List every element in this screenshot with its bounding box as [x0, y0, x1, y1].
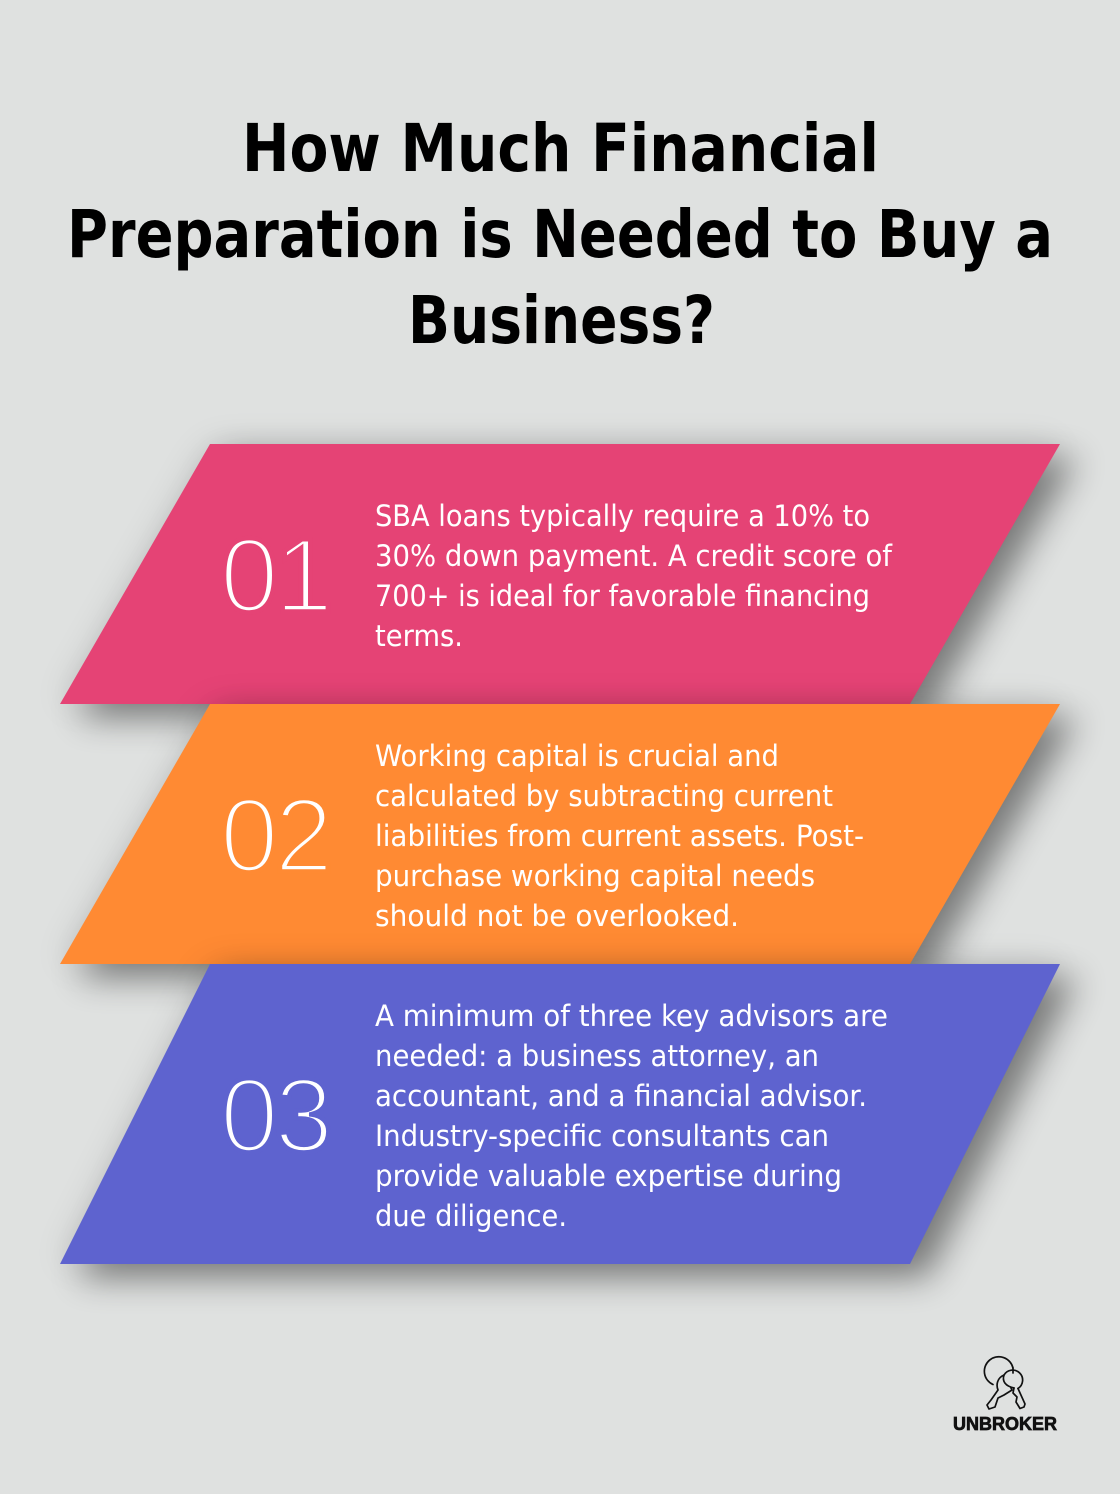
text block 03: due diligence. — [375, 1199, 567, 1233]
text block 02: Working capital is crucial and — [375, 739, 779, 773]
icon: keys — [984, 1357, 1025, 1409]
text block 01: 30% down payment. A credit score of — [375, 539, 893, 573]
text block 02: should not be overlooked. — [375, 899, 739, 933]
title: Business? — [408, 282, 715, 359]
number 03: 03 — [220, 1058, 333, 1174]
text block 03: accountant, and a financial advisor. — [375, 1079, 867, 1113]
text block 02: purchase working capital needs — [375, 859, 815, 893]
text block 02 — [375, 739, 864, 933]
shape: blue parallelogram — [60, 964, 1060, 1264]
text block 02: calculated by subtracting current — [375, 779, 833, 813]
panel: step 01 — [60, 444, 1078, 718]
text block 03 — [375, 999, 888, 1233]
shape: pink parallelogram — [60, 444, 1060, 704]
text block 03: Industry-specific consultants can — [375, 1119, 829, 1153]
title — [67, 110, 1053, 359]
number 01: 01 — [220, 518, 333, 634]
text block 03: needed: a business attorney, an — [375, 1039, 819, 1073]
logo: Unbroker keys — [953, 1357, 1057, 1434]
text block 01 — [375, 499, 893, 653]
shape: orange parallelogram — [60, 704, 1060, 964]
title: How Much Financial — [242, 110, 879, 187]
text block 01: 700+ is ideal for favorable financing — [375, 579, 870, 613]
wordmark: UNBROKER — [953, 1414, 1057, 1434]
text block 03: A minimum of three key advisors are — [375, 999, 888, 1033]
text block 03: provide valuable expertise during — [375, 1159, 842, 1193]
text block 01: terms. — [375, 619, 463, 653]
panel: step 03 — [60, 964, 1078, 1278]
text block 02: liabilities from current assets. Post- — [375, 819, 864, 853]
number 02: 02 — [220, 778, 333, 894]
panel: step 02 — [60, 704, 1078, 978]
text block 01: SBA loans typically require a 10% to — [375, 499, 870, 533]
